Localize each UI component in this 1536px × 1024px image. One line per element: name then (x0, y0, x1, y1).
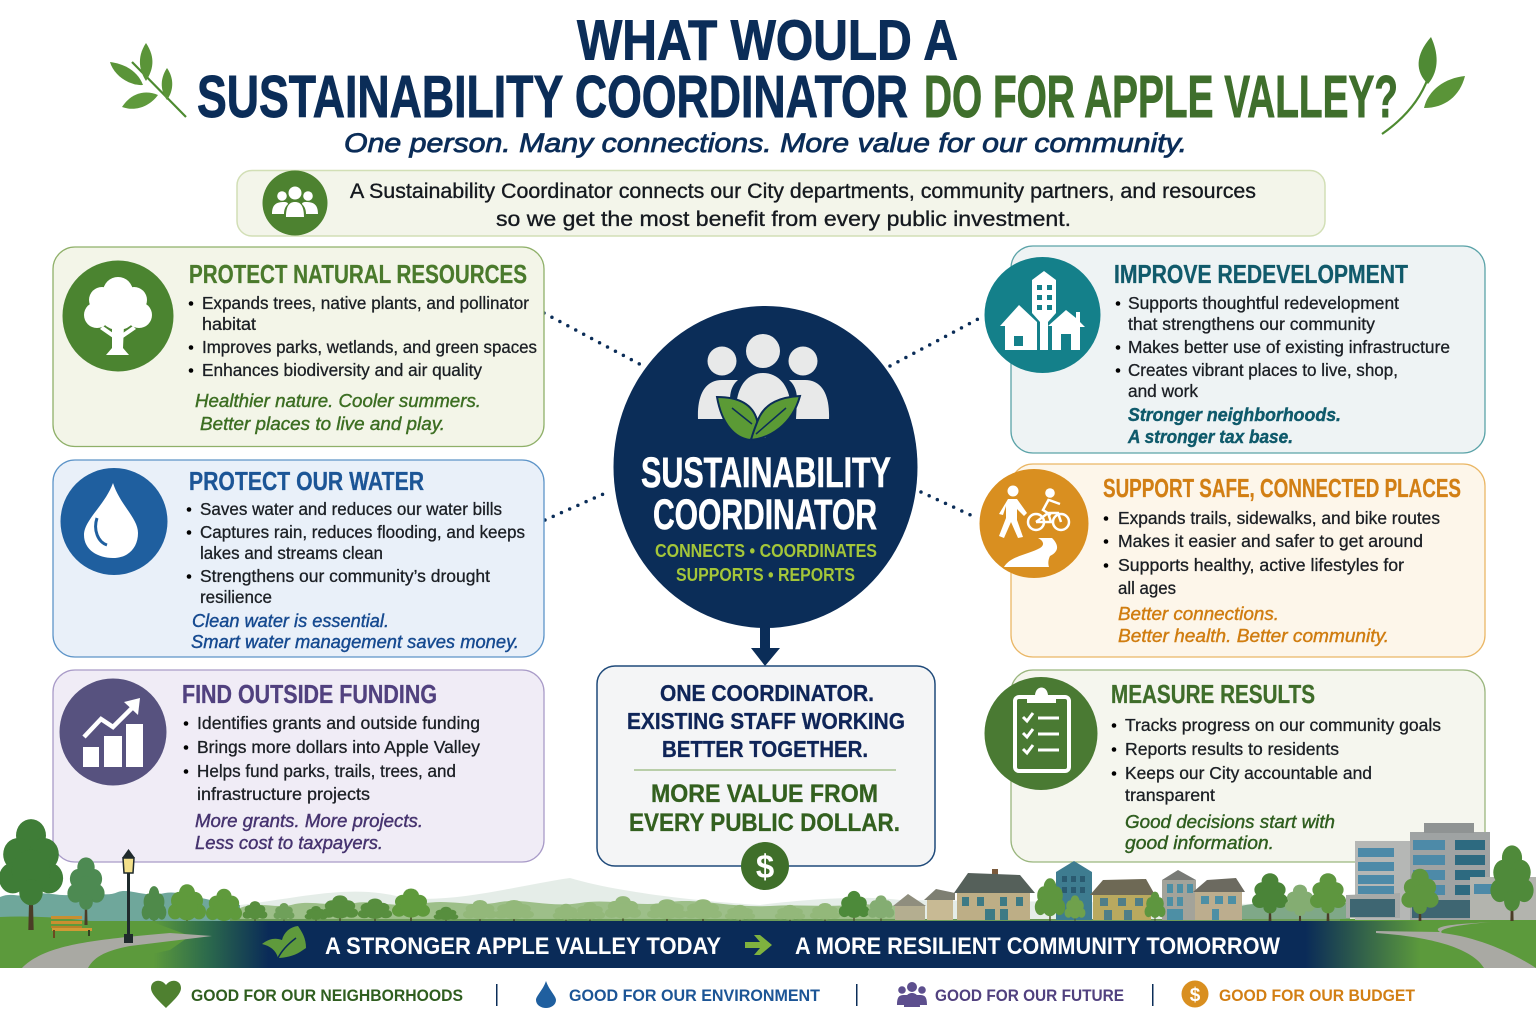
benefit: future (897, 982, 1124, 1007)
bullet list: Keeps our City accountable and (1125, 763, 1372, 783)
footer: benefits row (151, 980, 1416, 1008)
hub roles: SUPPORTS • REPORTS (676, 565, 855, 585)
bullet list: Creates vibrant places to live, shop, (1128, 360, 1398, 380)
bullet list: all ages (1118, 578, 1176, 598)
bullet list: Identifies grants and outside funding (197, 713, 480, 733)
hub title: COORDINATOR (653, 491, 877, 539)
bullet list: Captures rain, reduces flooding, and keeps (200, 522, 525, 542)
heading: FIND OUTSIDE FUNDING (182, 679, 437, 709)
bullet list: that strengthens our community (1128, 314, 1375, 334)
bullet list: habitat (202, 314, 256, 334)
icon: growth chart (60, 678, 166, 786)
callout text: one coordinator: EXISTING STAFF WORKING (627, 708, 905, 734)
icon: dollar coin (741, 842, 789, 890)
bullet list (187, 499, 525, 607)
tagline: Better places to live and play. (200, 414, 445, 434)
tagline: Healthier nature. Cooler summers. (195, 391, 481, 411)
callout text: one coordinator: ONE COORDINATOR. (660, 680, 874, 706)
intro text (350, 180, 1256, 231)
benefit: neighborhoods (151, 981, 463, 1008)
tagline: A stronger tax base. (1127, 427, 1293, 447)
trees among houses (1035, 873, 1346, 925)
icon: buildings (984, 257, 1100, 373)
arrow: coordinator to value box (751, 626, 780, 666)
tagline: Better connections. (1118, 604, 1279, 624)
icon: banner leaves (262, 926, 306, 958)
bullet list: Supports thoughtful redevelopment (1128, 293, 1399, 313)
panel: intro statement (237, 170, 1325, 236)
bullet list: Expands trees, native plants, and pollinator (202, 293, 529, 313)
panel: find outside funding (53, 670, 544, 862)
connector dotted lines (544, 313, 980, 520)
bullet list (1112, 715, 1441, 805)
navy band (0, 921, 1536, 968)
bullet list: Makes it easier and safer to get around (1118, 531, 1423, 551)
benefit: budget: GOOD FOR OUR BUDGET (1219, 986, 1416, 1005)
heading: IMPROVE REDEVELOPMENT (1114, 259, 1408, 289)
bullet list (1116, 293, 1450, 401)
heading: PROTECT OUR WATER (189, 466, 424, 496)
heading: PROTECT NATURAL RESOURCES (189, 259, 527, 289)
panel: measure results (984, 670, 1485, 862)
tagline: More grants. More projects. (195, 811, 423, 831)
tagline (195, 811, 423, 853)
heading: MEASURE RESULTS (1111, 679, 1315, 709)
callout text: one coordinator (627, 680, 905, 762)
bullet list: Brings more dollars into Apple Valley (197, 737, 480, 757)
tagline: Stronger neighborhoods. (1128, 405, 1341, 425)
pale tree row (463, 896, 840, 922)
panel: support safe connected places (980, 464, 1485, 657)
benefit: budget: $ (1190, 985, 1201, 1006)
tagline: Better health. Better community. (1118, 626, 1389, 646)
bullet list: transparent (1125, 785, 1215, 805)
arrow: today to tomorrow (745, 935, 772, 955)
panel: improve redevelopment (984, 246, 1485, 453)
office buildings (1346, 823, 1536, 920)
icon: walker and cyclist (980, 469, 1088, 578)
benefit: budget (1182, 980, 1416, 1008)
icon: dollar coin: $ (756, 848, 774, 885)
bullet list: Tracks progress on our community goals (1125, 715, 1441, 735)
bullet list: Saves water and reduces our water bills (200, 499, 502, 519)
teal far treeline left (0, 891, 240, 921)
tagline: good information. (1125, 833, 1274, 853)
right foreground path (1376, 922, 1536, 968)
icon: water drop (60, 468, 168, 575)
icon: tree (62, 260, 174, 372)
benefit: future: GOOD FOR OUR FUTURE (935, 986, 1124, 1005)
callout: value box (597, 666, 935, 890)
benefit: neighborhoods: GOOD FOR OUR NEIGHBORHOODS (191, 986, 463, 1005)
tagline (1127, 405, 1341, 447)
green tree row (142, 884, 894, 926)
hub title (641, 449, 891, 539)
center hub: sustainability coordinator (614, 306, 918, 628)
hub title: SUSTAINABILITY (641, 449, 891, 497)
right ground (1340, 915, 1536, 968)
bullet list: resilience (200, 587, 272, 607)
intro text: so we get the most benefit from every public investment. (496, 208, 1071, 231)
bullet list: infrastructure projects (197, 784, 370, 804)
bullet list (1104, 508, 1440, 598)
tagline (1125, 812, 1335, 853)
callout text: more value: EVERY PUBLIC DOLLAR. (629, 809, 900, 837)
bullet list: and work (1128, 381, 1198, 401)
pale hedge (240, 901, 900, 921)
icon: people with leaves (698, 334, 829, 440)
intro text: A Sustainability Coordinator connects our City departments, community partners, and resources (350, 180, 1256, 203)
distant misty hills (240, 878, 1350, 921)
tagline: Smart water management saves money. (191, 632, 519, 652)
bullet list (189, 293, 537, 380)
landscape illustration (0, 819, 1536, 968)
tagline (1118, 604, 1389, 646)
banner text (262, 926, 1281, 960)
tagline: Good decisions start with (1125, 812, 1335, 832)
subtitle: One person. Many connections. More value for our community. (344, 128, 1187, 158)
tagline (191, 611, 519, 652)
hub roles (655, 541, 877, 585)
bullet list (184, 713, 480, 804)
bullet list: Strengthens our community’s drought (200, 566, 490, 586)
banner text: A MORE RESILIENT COMMUNITY TOMORROW (795, 933, 1281, 960)
tagline: Less cost to taxpayers. (195, 833, 383, 853)
bullet list: Enhances biodiversity and air quality (202, 360, 482, 380)
callout text: more value: MORE VALUE FROM (651, 780, 878, 808)
benefit: environment (536, 981, 821, 1008)
benefit: environment: GOOD FOR OUR ENVIRONMENT (569, 986, 821, 1005)
panel: protect natural resources (53, 247, 544, 446)
icon: clipboard (984, 677, 1098, 790)
bullet list: Reports results to residents (1125, 739, 1339, 759)
foreground trees right (1401, 845, 1534, 930)
left foreground: ground, path, bench, lamp and trees (0, 819, 212, 968)
title: SUSTAINABILITY COORDINATOR (197, 64, 908, 130)
banner text: A STRONGER APPLE VALLEY TODAY (325, 933, 721, 960)
tagline: Clean water is essential. (192, 611, 389, 631)
title (197, 8, 1398, 130)
bullet list: Helps fund parks, trails, trees, and (197, 761, 456, 781)
title: WHAT WOULD A (577, 8, 958, 72)
hub roles: CONNECTS • COORDINATES (655, 541, 877, 561)
bullet list: lakes and streams clean (200, 543, 383, 563)
icon: right leaf sprig (1382, 37, 1465, 134)
bullet list: Improves parks, wetlands, and green spaces (202, 337, 537, 357)
bullet list: Supports healthy, active lifestyles for (1118, 555, 1404, 575)
icon: left leaf sprig (110, 43, 186, 117)
bullet list: Makes better use of existing infrastructure (1128, 337, 1450, 357)
callout text: more value (629, 780, 900, 837)
tagline (195, 391, 481, 434)
ground left (0, 916, 230, 968)
panel: protect our water (53, 460, 544, 657)
bullet list: Expands trails, sidewalks, and bike routes (1118, 508, 1440, 528)
icon: people (262, 170, 328, 236)
callout text: one coordinator: BETTER TOGETHER. (662, 736, 868, 762)
houses (893, 861, 1245, 920)
